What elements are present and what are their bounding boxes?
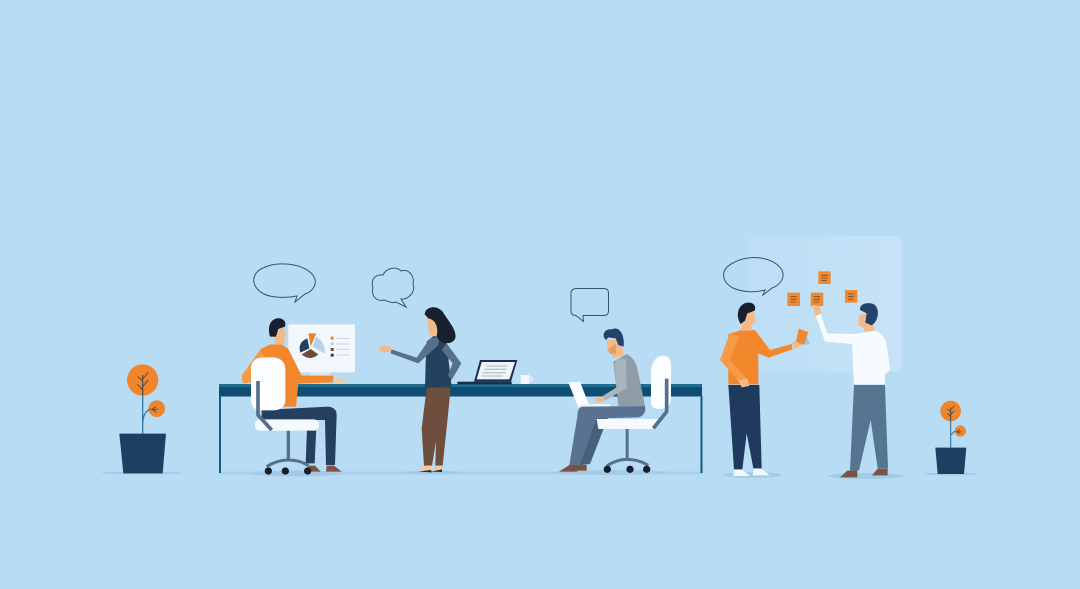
laptop: dark on desk xyxy=(457,360,517,384)
jacket xyxy=(425,335,452,388)
pointing arm xyxy=(391,337,439,363)
hair xyxy=(269,318,285,337)
speech bubble: cloud xyxy=(372,268,414,307)
shirt xyxy=(260,344,333,407)
near leg xyxy=(569,406,645,465)
shirt xyxy=(728,330,793,384)
jeans xyxy=(728,385,762,469)
glass wall panel xyxy=(747,236,901,372)
far leg xyxy=(578,417,608,465)
neck and face xyxy=(274,327,286,345)
hair xyxy=(738,303,755,324)
hand xyxy=(379,346,392,352)
arm xyxy=(603,359,627,401)
speech bubble: right oval xyxy=(724,258,783,295)
trousers xyxy=(850,385,888,471)
person: seated man with laptop xyxy=(559,328,645,472)
coffee cup xyxy=(521,375,532,384)
plant: large left xyxy=(119,364,166,473)
speech bubble: rectangle xyxy=(571,288,608,322)
chart legend xyxy=(331,337,349,357)
shoes xyxy=(733,469,770,476)
arm xyxy=(720,334,748,387)
arm xyxy=(242,349,267,383)
face and neck xyxy=(742,310,756,331)
trousers xyxy=(262,407,337,465)
sweater xyxy=(613,354,645,406)
shoes xyxy=(840,469,888,477)
shoes xyxy=(307,466,342,472)
laptop xyxy=(568,382,611,407)
hands xyxy=(738,338,802,387)
person: man in orange shirt xyxy=(720,303,810,476)
shirt xyxy=(816,314,890,384)
feet xyxy=(419,466,442,472)
hair xyxy=(860,303,878,325)
chair: right xyxy=(597,356,671,473)
shoes xyxy=(559,465,587,472)
neck and face xyxy=(607,340,624,358)
person: seated man at monitor xyxy=(242,318,346,472)
hair xyxy=(604,328,624,347)
hand xyxy=(595,397,604,402)
speech bubble: oval xyxy=(254,264,315,302)
bent arm xyxy=(442,343,461,380)
hair xyxy=(425,307,456,343)
trousers xyxy=(422,388,451,466)
face and neck xyxy=(427,315,437,337)
sticky notes xyxy=(787,271,857,306)
chair: left xyxy=(251,357,319,475)
plant: small right xyxy=(935,401,966,474)
hand xyxy=(813,305,821,315)
floor shadows xyxy=(101,470,978,479)
computer monitor with pie chart xyxy=(288,324,355,379)
person: man in white shirt xyxy=(813,303,890,477)
face and neck xyxy=(858,313,875,332)
pie chart xyxy=(300,333,325,358)
person: standing woman xyxy=(379,307,461,472)
held note xyxy=(796,329,810,345)
desk xyxy=(219,384,702,473)
beard xyxy=(608,343,616,354)
hand on mouse xyxy=(333,378,346,383)
